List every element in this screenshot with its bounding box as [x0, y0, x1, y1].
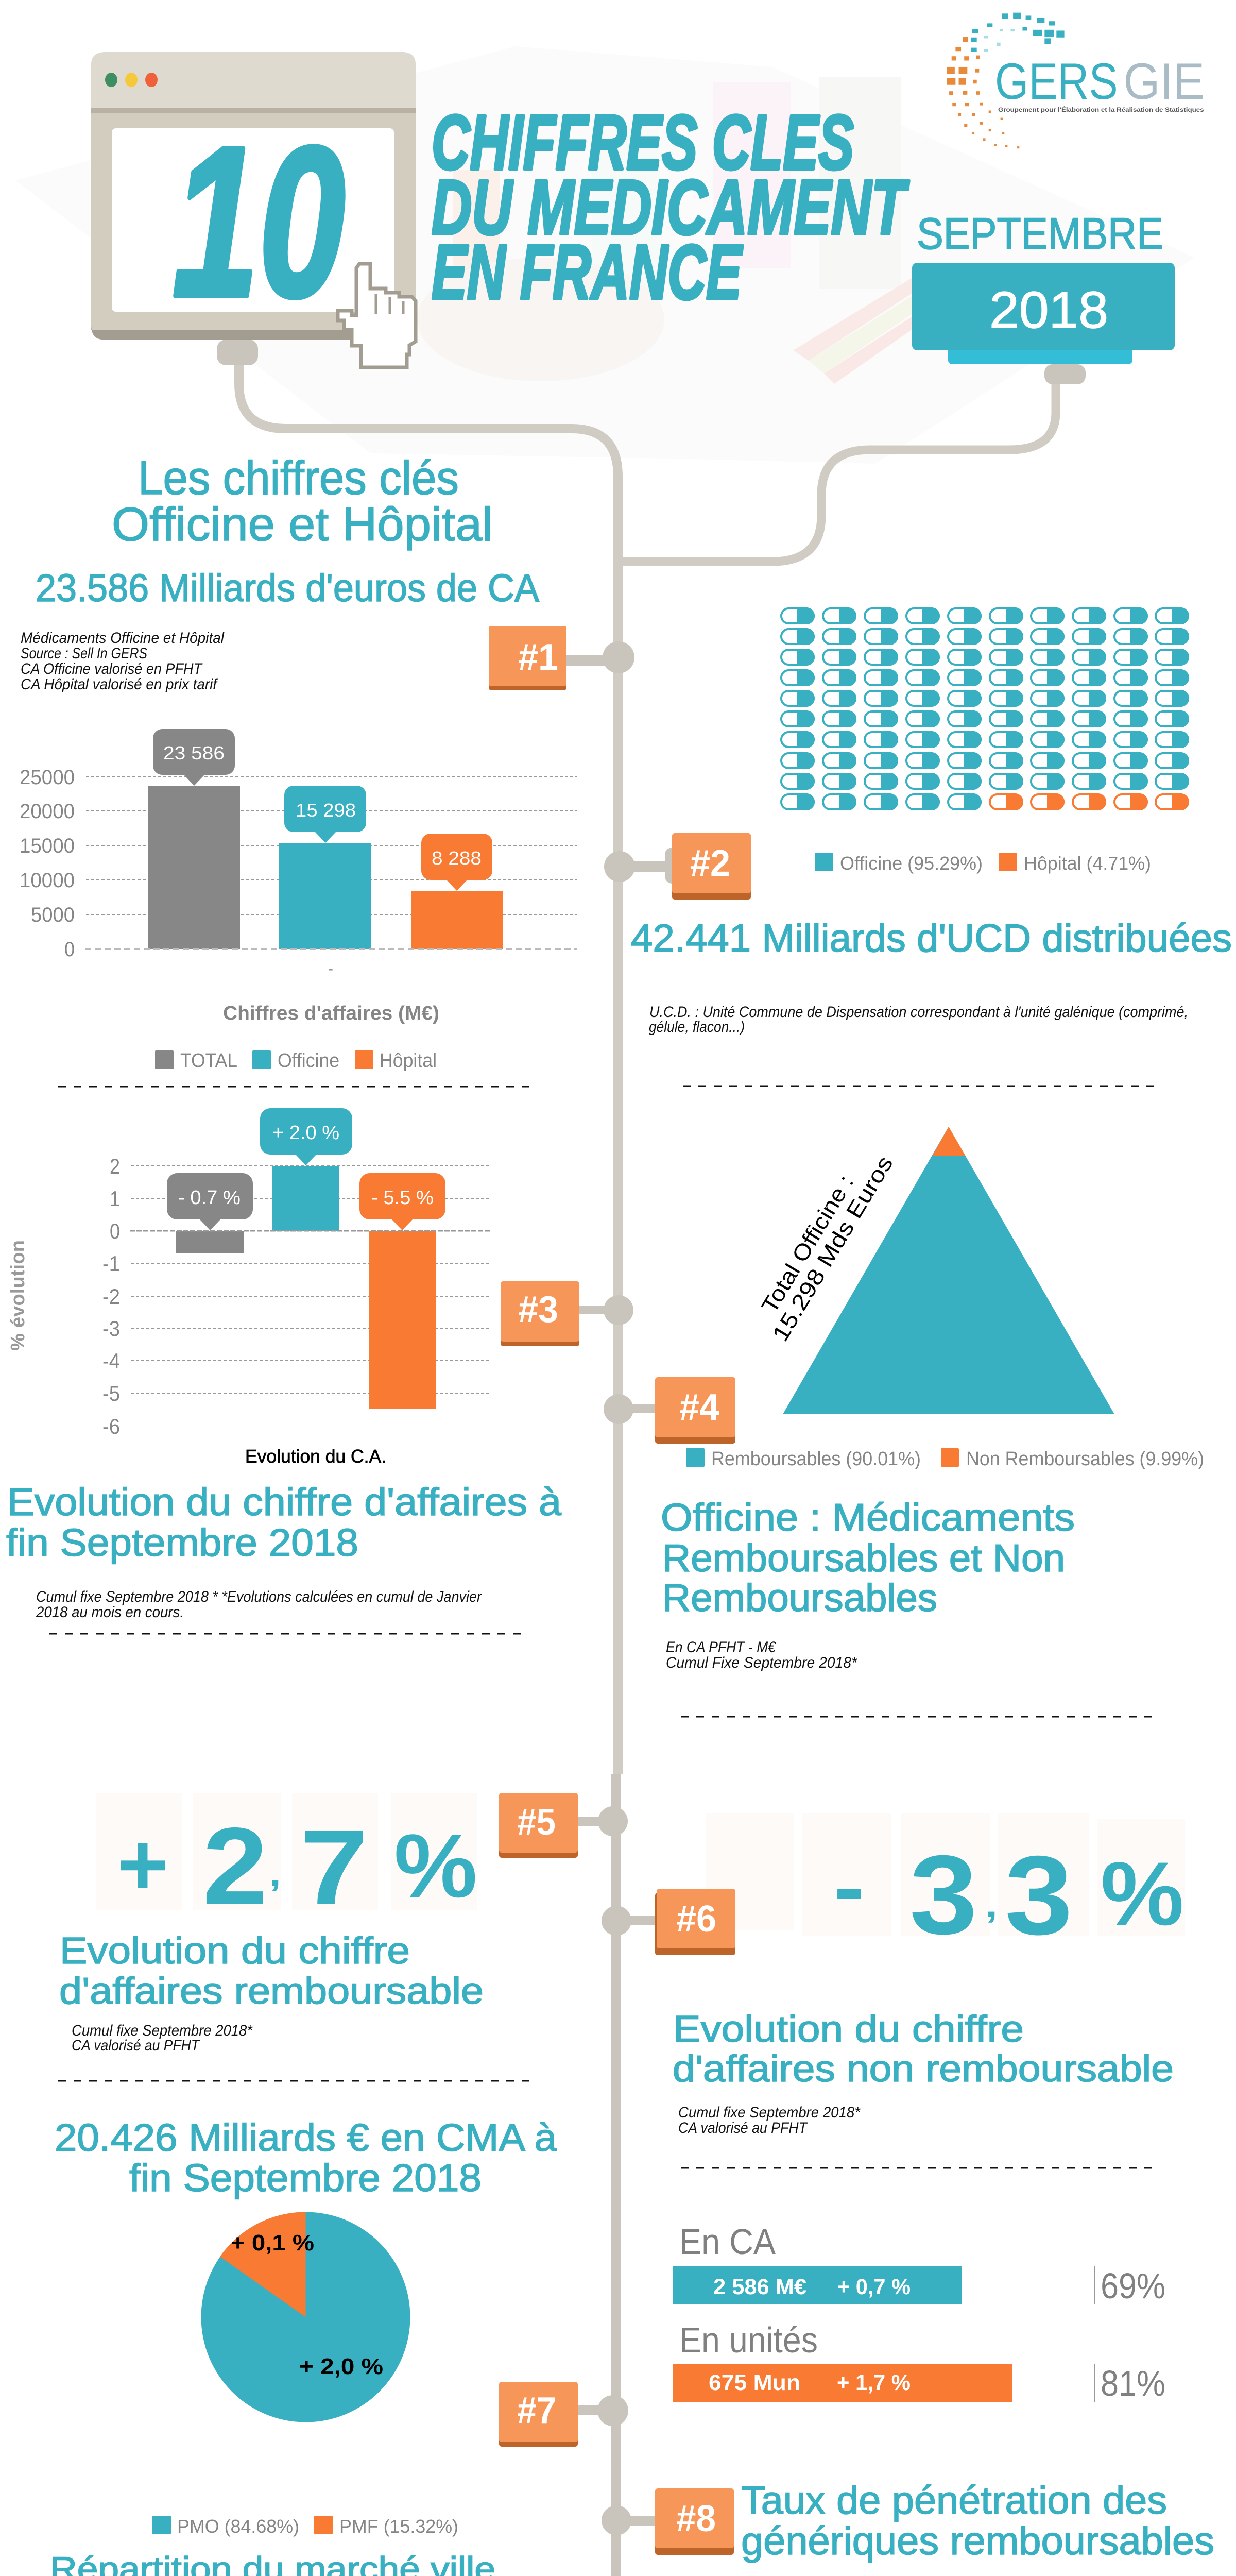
heading #3 — [6, 1480, 561, 1564]
window illustration with number 10 — [91, 52, 416, 365]
heading #2: 42.441 Milliards d'UCD distribuées — [631, 917, 1232, 960]
background: faded chart photo — [15, 46, 1195, 464]
title — [432, 99, 909, 315]
note #4: Cumul Fixe Septembre 2018* — [666, 1654, 857, 1671]
bar chart: chiffres d'affaires: 15000 — [20, 835, 75, 857]
heading #4 — [661, 1496, 1075, 1619]
heading #6 — [673, 2009, 1174, 2090]
note #3: Cumul fixe Septembre 2018 * *Evolutions calculées en cumul de Janvier — [36, 1588, 482, 1605]
waffle chart: UCD — [781, 607, 1189, 874]
big figure: -3,3 %: 3 — [1005, 1833, 1073, 1958]
legend — [686, 1448, 1204, 1470]
bar chart: chiffres d'affaires: 10000 — [20, 869, 75, 892]
legend: Officine — [278, 1050, 339, 1072]
badge #4: #4 — [679, 1387, 719, 1428]
penetration bars: 69% — [1101, 2266, 1165, 2306]
bar chart: evolution %: -2 — [102, 1284, 120, 1309]
legend: PMO (84.68%) — [177, 2516, 299, 2537]
callout: 15 298: 15 298 — [296, 800, 356, 821]
bar en CA — [673, 2266, 1095, 2304]
note #1 — [21, 630, 225, 693]
bar chart: evolution %: -3 — [102, 1316, 120, 1341]
bar en unites — [673, 2364, 1095, 2402]
callout: -5.5: - 5.5 % — [371, 1187, 434, 1209]
big figure: -3,3 % — [706, 1813, 1185, 1958]
bar chart: evolution %: -6 — [102, 1414, 120, 1438]
badge #6 — [602, 1889, 735, 1955]
heading #7 — [55, 2116, 557, 2199]
bar chart: evolution %: 0 — [110, 1219, 120, 1243]
big figure: -3,3 %: - — [834, 1840, 865, 1933]
penetration bars: 81% — [1101, 2363, 1165, 2403]
pie chart: PMO PMF: + 2,0 % — [299, 2354, 383, 2379]
bar chart: chiffres d'affaires: - — [328, 960, 333, 977]
callout: 23 586 — [153, 729, 235, 786]
heading #5: d'affaires remboursable — [59, 1971, 484, 2012]
bar chart: evolution %: -5 — [102, 1381, 120, 1405]
note #1: Médicaments Officine et Hôpital — [21, 630, 225, 647]
legend: TOTAL — [180, 1050, 237, 1072]
big figure: +2,7 % — [96, 1793, 477, 1927]
bar en CA: + 0,7 % — [837, 2275, 911, 2299]
heading #5 — [59, 1930, 484, 2012]
note #1: CA Officine valorisé en PFHT — [21, 660, 203, 677]
big figure: -3,3 %: 3 — [909, 1833, 977, 1958]
legend — [815, 853, 1151, 874]
callout: +2.0 — [260, 1108, 352, 1165]
big figure: +2,7 %: + — [117, 1815, 168, 1914]
legend: Non Remboursables (9.99%) — [966, 1448, 1204, 1470]
heading #3: Evolution du chiffre d'affaires à — [7, 1480, 561, 1523]
legend: Officine (95.29%) — [840, 853, 983, 874]
badge #3 — [501, 1281, 633, 1346]
badge #1 — [489, 626, 634, 690]
note #4 — [666, 1639, 857, 1671]
title: EN FRANCE — [432, 229, 743, 315]
big figure: +2,7 %: 7 — [300, 1808, 368, 1926]
note #2 — [649, 1004, 1188, 1036]
bar chart: chiffres d'affaires: 20000 — [20, 800, 75, 823]
heading #1: 23.586 Milliards d'euros de CA — [36, 566, 539, 609]
heading #8: génériques remboursables — [741, 2519, 1214, 2563]
heading #7: fin Septembre 2018 — [129, 2156, 482, 2199]
rotated label: 15.298 Mds Euros — [768, 1151, 898, 1346]
badge #1: #1 — [518, 637, 558, 678]
bar chart: evolution %: -4 — [102, 1349, 120, 1373]
pie chart: PMO PMF — [152, 2212, 458, 2537]
bar en unites: 675 Mun — [709, 2370, 800, 2395]
note #2: U.C.D. : Unité Commune de Dispensation correspondant à l'unité galénique (comprimé, — [649, 1004, 1188, 1021]
heading #4: Officine : Médicaments — [661, 1496, 1075, 1539]
heading: les chiffres cles — [112, 452, 493, 551]
bar en CA: 2 586 M€ — [713, 2275, 806, 2299]
title: CHIFFRES CLES — [432, 99, 854, 185]
legend: Remboursables (90.01%) — [711, 1448, 921, 1470]
callout: -0.7: - 0.7 % — [178, 1187, 241, 1209]
note #5 — [72, 2022, 253, 2054]
heading: les chiffres cles: Les chiffres clés — [138, 452, 459, 504]
triangle chart: remboursables — [686, 1127, 1204, 1470]
big figure: +2,7 %: 2 — [202, 1805, 268, 1927]
date panel: SEPTEMBRE — [917, 209, 1163, 259]
callout: 23 586: 23 586 — [163, 742, 225, 764]
callout: +2.0: + 2.0 % — [272, 1122, 339, 1144]
heading: les chiffres cles: Officine et Hôpital — [112, 498, 493, 551]
note #2: gélule, flacon...) — [649, 1019, 745, 1036]
bar chart: evolution % — [7, 1108, 491, 1467]
heading #6: d'affaires non remboursable — [673, 2048, 1174, 2090]
callout: -5.5 — [359, 1173, 445, 1230]
badge #2 — [604, 833, 751, 900]
note #6: CA valorisé au PFHT — [678, 2120, 808, 2137]
bar chart: chiffres d'affaires: 5000 — [31, 904, 75, 926]
legend: Hôpital — [380, 1050, 437, 1072]
badge #8: #8 — [676, 2498, 716, 2539]
rotated label: Total Officine : — [757, 1171, 859, 1317]
note #1: Source : Sell In GERS — [21, 645, 147, 662]
badge #4 — [604, 1377, 735, 1444]
callout: 8 288 — [421, 834, 492, 891]
heading #5: Evolution du chiffre — [60, 1930, 410, 1972]
pie chart: PMO PMF: + 0,1 % — [231, 2230, 314, 2256]
note #3 — [36, 1588, 482, 1621]
heading #4: Remboursables — [662, 1576, 937, 1619]
big figure: +2,7 %: , — [269, 1853, 281, 1893]
heading #3: fin Septembre 2018 — [6, 1521, 358, 1564]
title: DU MEDICAMENT — [432, 164, 909, 250]
badge #5: #5 — [517, 1802, 556, 1843]
badge #2: #2 — [690, 843, 730, 884]
bar chart: evolution %: -1 — [102, 1251, 120, 1276]
bar en unites: + 1,7 % — [837, 2370, 911, 2395]
note #5: CA valorisé au PFHT — [72, 2037, 200, 2054]
badge #3: #3 — [518, 1289, 558, 1330]
bar chart: evolution %: 2 — [110, 1154, 120, 1178]
big figure: -3,3 %: % — [1101, 1844, 1184, 1944]
heading #7: 20.426 Milliards € en CMA à — [55, 2116, 557, 2159]
note #5: Cumul fixe Septembre 2018* — [72, 2022, 253, 2039]
penetration bars: En unités — [679, 2320, 818, 2360]
badge #5 — [499, 1793, 628, 1858]
y axis title: % évolution — [7, 1240, 29, 1351]
logo GERS GIE header — [947, 13, 1205, 148]
badge #6: #6 — [676, 1899, 716, 1940]
heading #4: Remboursables et Non — [662, 1536, 1065, 1580]
legend — [155, 1050, 437, 1072]
note #6 — [678, 2104, 861, 2137]
big figure: +2,7 %: % — [394, 1816, 477, 1917]
big number 10: 10 — [173, 102, 345, 341]
callout: -0.7 — [167, 1173, 253, 1230]
badge #7 — [499, 2382, 628, 2447]
legend: Hôpital (4.71%) — [1024, 853, 1151, 874]
bar chart: chiffres d'affaires: 0 — [64, 938, 75, 961]
note #4: En CA PFHT - M€ — [666, 1639, 776, 1656]
heading #6: Evolution du chiffre — [673, 2009, 1024, 2050]
badge #8 — [602, 2488, 734, 2555]
bar chart: evolution %: 1 — [110, 1187, 120, 1211]
legend: PMF (15.32%) — [339, 2516, 458, 2537]
big figure: -3,3 %: , — [985, 1885, 998, 1925]
note #3: 2018 au mois en cours. — [36, 1604, 184, 1621]
bar chart: evolution %: Evolution du C.A. — [245, 1446, 386, 1467]
date panel — [912, 209, 1175, 384]
bar chart: chiffres d'affaires — [20, 729, 577, 1072]
penetration bars: En CA — [679, 2222, 776, 2262]
heading #8: Taux de pénétration des — [741, 2479, 1167, 2522]
callout: 15 298 — [284, 786, 366, 843]
bar chart: chiffres d'affaires: 25000 — [20, 766, 75, 789]
heading #8 — [741, 2479, 1214, 2563]
note #6: Cumul fixe Septembre 2018* — [678, 2104, 861, 2121]
callout: 8 288: 8 288 — [432, 848, 482, 869]
legend — [152, 2516, 458, 2537]
icon: pointer hand — [338, 264, 416, 367]
penetration bars — [673, 2222, 1165, 2403]
date panel: 2018 — [989, 281, 1108, 339]
bar chart: chiffres d'affaires: Chiffres d'affaires (M€) — [223, 1003, 439, 1024]
connector lines from header to timeline — [239, 365, 1056, 2576]
note #1: CA Hôpital valorisé en prix tarif — [21, 676, 218, 693]
badge #7: #7 — [517, 2390, 556, 2431]
